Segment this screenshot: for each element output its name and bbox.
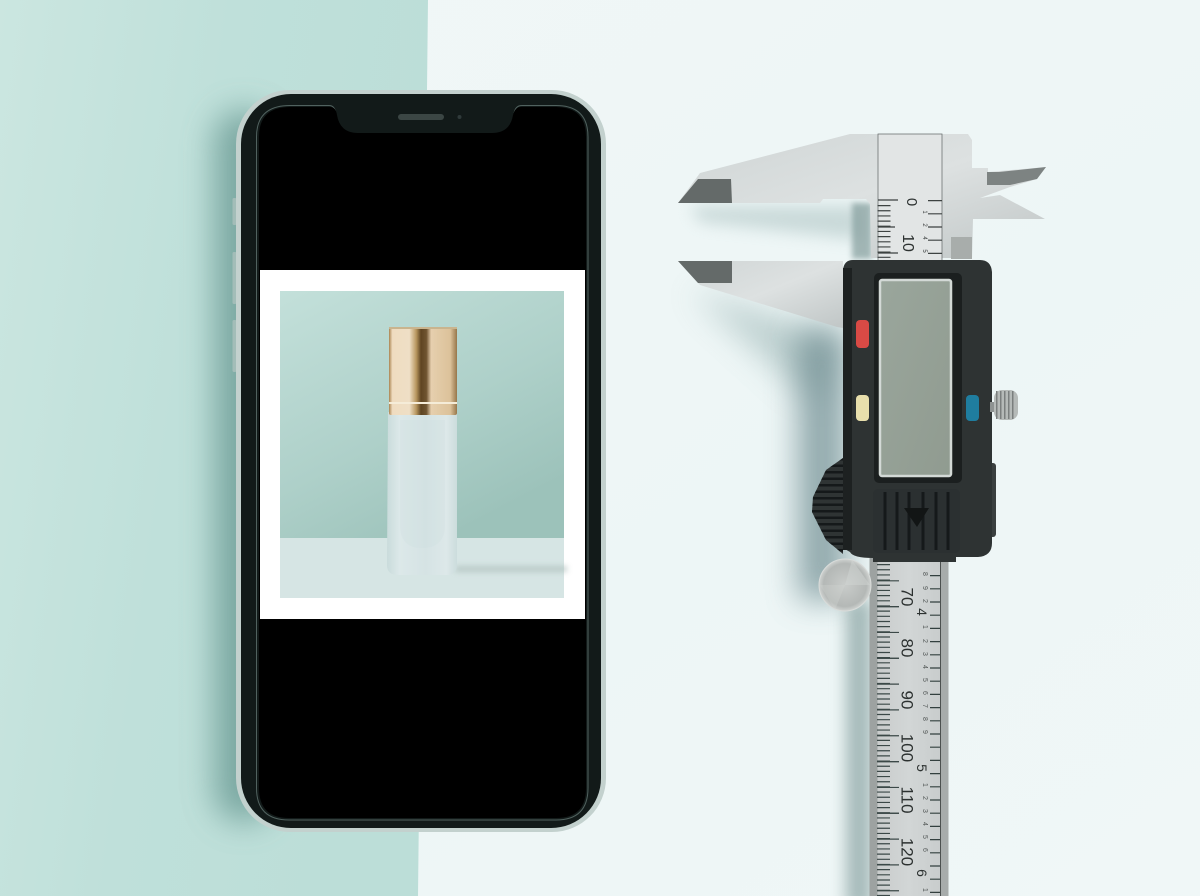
lower beam scale: 3	[921, 809, 928, 813]
millimetre numbers: 80	[898, 639, 916, 657]
upper beam scale: 0	[903, 198, 920, 206]
lower jaw tip	[678, 261, 732, 283]
lower beam scale: 5	[921, 678, 928, 682]
lower beam scale: 4	[921, 665, 928, 669]
lower beam scale: 9	[921, 730, 928, 734]
lower beam scale: 8	[921, 717, 928, 721]
phone shadow	[214, 110, 274, 822]
lower step block	[951, 237, 972, 259]
display recess	[874, 273, 962, 483]
side buttons	[232, 198, 236, 372]
upper beam scale: 10	[899, 234, 916, 252]
upper beam scale	[878, 134, 942, 262]
lower beam scale: 4	[921, 822, 928, 826]
upper beam scale: 5	[921, 249, 927, 253]
lower jaw	[678, 261, 843, 328]
wall	[280, 291, 564, 538]
triangle mark	[904, 508, 929, 527]
inch numbers	[914, 608, 930, 877]
lower beam scale: 2	[921, 639, 928, 643]
lower beam scale: 1	[921, 625, 928, 629]
digital caliper	[678, 134, 1046, 896]
lower beam scale: 2	[921, 599, 928, 603]
right knife edge	[987, 167, 1046, 185]
body edge	[843, 268, 852, 550]
bottle inner reflection	[400, 420, 445, 548]
inch numbers: 5	[914, 764, 930, 772]
screen	[259, 107, 586, 818]
phone frame	[236, 90, 606, 832]
lower beam scale	[870, 555, 948, 896]
upper beam scale: 2	[921, 223, 927, 227]
millimetre numbers: 110	[898, 786, 916, 814]
yellow button	[856, 395, 869, 421]
inch ticks	[930, 575, 940, 896]
blue button	[966, 395, 979, 421]
table	[280, 538, 564, 598]
upper beam scale: 4	[921, 236, 927, 240]
background: teal paper	[0, 0, 428, 896]
millimetre ticks	[877, 564, 890, 896]
lower beam scale: 7	[921, 704, 928, 708]
upper beam scale: 1	[921, 210, 927, 214]
caliper shadows	[690, 203, 872, 896]
lower beam scale: 1	[921, 888, 928, 892]
ribbed pad	[873, 489, 960, 553]
body	[843, 260, 992, 562]
left grip	[812, 458, 843, 554]
millimetre numbers	[898, 588, 916, 866]
lower beam scale: 5	[921, 835, 928, 839]
white card	[260, 270, 585, 619]
bottle shadow	[455, 566, 567, 572]
millimetre numbers: 70	[898, 588, 916, 606]
lower beam scale: 2	[921, 796, 928, 800]
LCD screen	[880, 280, 951, 476]
inch numbers: 4	[914, 608, 930, 616]
millimetre numbers: 90	[898, 691, 916, 709]
lower beam scale: 8	[921, 572, 928, 576]
upper jaws	[678, 134, 1046, 258]
phone	[232, 90, 606, 832]
product photo	[280, 291, 567, 598]
bottle cap	[389, 327, 457, 415]
speaker and camera	[398, 114, 462, 120]
millimetre numbers: 100	[898, 734, 916, 762]
lower beam scale: 3	[921, 652, 928, 656]
upper jaw tip	[678, 179, 732, 203]
lower beam scale: 6	[921, 848, 928, 852]
millimetre numbers: 120	[898, 838, 916, 866]
phone bezel	[241, 94, 601, 828]
thumb wheel	[819, 559, 871, 611]
lower beam scale: 9	[921, 586, 928, 590]
red button	[856, 320, 869, 348]
right grip	[988, 463, 996, 537]
adjustment screw	[990, 390, 1018, 420]
lower beam scale: 6	[921, 691, 928, 695]
inch numbers: 6	[914, 869, 930, 877]
lower beam scale: 1	[921, 783, 928, 787]
bottle body	[387, 412, 457, 575]
